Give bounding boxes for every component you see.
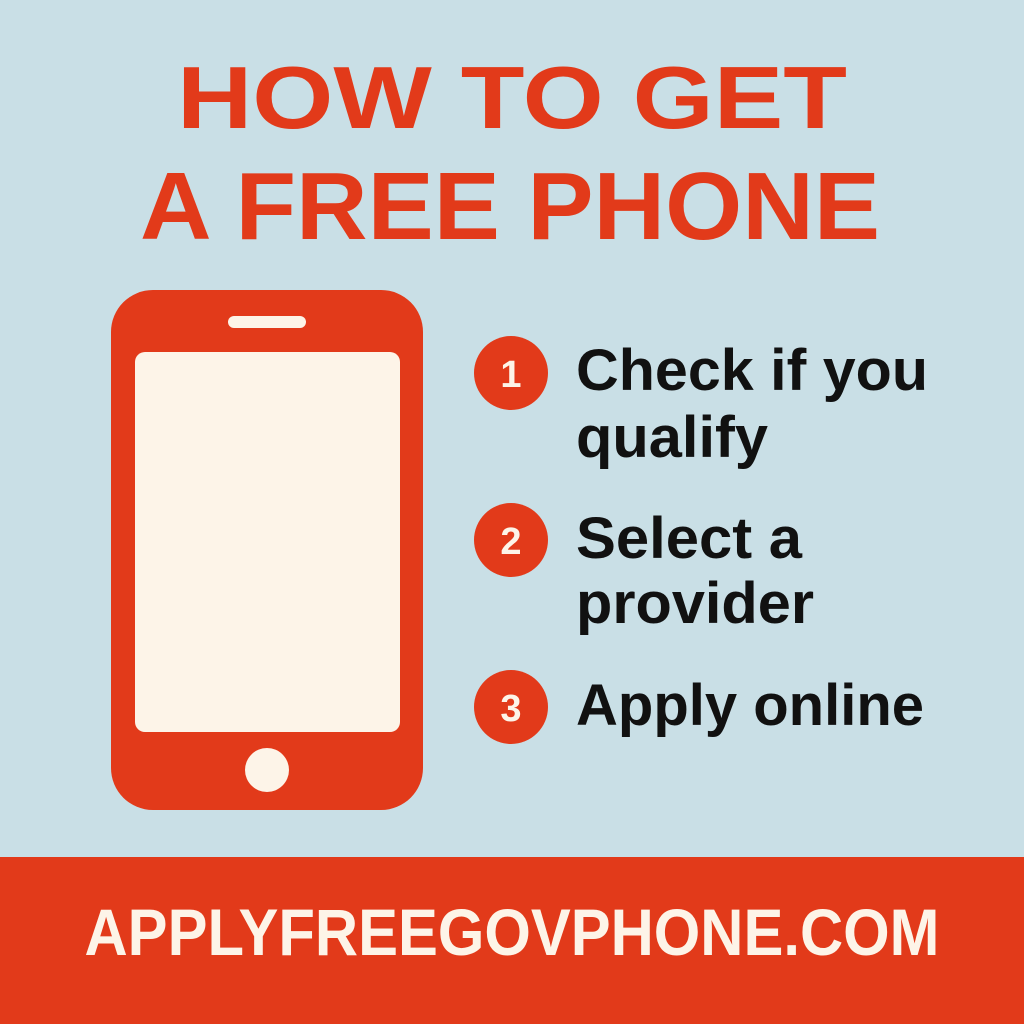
footer banner [0, 857, 1024, 1024]
title [140, 48, 880, 260]
footer banner: APPLYFREEGOVPHONE.COM [84, 895, 940, 969]
title: A FREE PHONE [140, 153, 880, 260]
icon: phone [111, 290, 423, 810]
step 2: 2 [500, 521, 522, 563]
step 1: Check if you [576, 338, 928, 403]
step 1 [474, 336, 928, 470]
step 2 [474, 503, 814, 636]
step 2: Select a [576, 506, 803, 571]
step 1: qualify [576, 405, 768, 470]
step 3 [474, 670, 924, 744]
title: HOW TO GET [177, 48, 847, 147]
step 1: 1 [500, 354, 522, 396]
step 3: 3 [500, 688, 522, 730]
step 3: Apply online [576, 673, 924, 738]
step 2: provider [576, 571, 814, 636]
